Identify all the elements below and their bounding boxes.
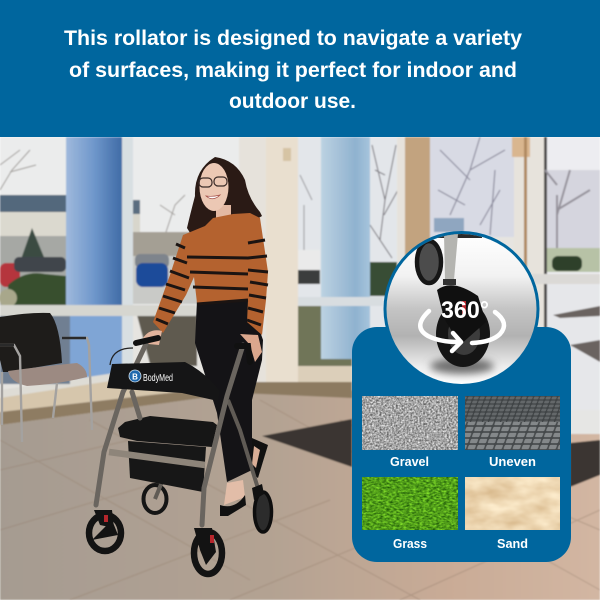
neck [216, 205, 231, 219]
surface: grass: Grass [393, 536, 427, 551]
rear wheels [144, 400, 272, 532]
header banner [0, 0, 600, 137]
handles [136, 338, 250, 362]
logo badge [129, 370, 141, 382]
left window frames [0, 137, 196, 398]
blue column left [66, 137, 122, 306]
hair [187, 157, 262, 238]
floor [0, 385, 600, 600]
logo badge: B [132, 372, 138, 382]
rollator [89, 338, 272, 574]
cross bar [109, 452, 205, 465]
heading: This rollator is designed to navigate a variety [64, 27, 522, 50]
surface: grass [362, 477, 458, 551]
chair [0, 313, 92, 442]
hands [143, 330, 162, 345]
parking lot with cars [0, 228, 239, 366]
label: 360 degrees: 360° [441, 297, 489, 324]
surface: uneven: Uneven [489, 454, 536, 469]
surface: uneven [465, 396, 560, 469]
panel: surfaces [352, 327, 571, 562]
glasses [199, 177, 227, 187]
icon: caster wheel [417, 232, 494, 374]
trousers and shoes [195, 300, 268, 516]
woman [143, 157, 268, 516]
heading: of surfaces, making it perfect for indoor and [69, 59, 517, 82]
brand name: BodyMed [143, 373, 173, 384]
brake cable [110, 348, 133, 365]
surface: sand: Sand [497, 536, 528, 551]
heading: outdoor use. [229, 90, 356, 113]
callout: 360 degree wheel [384, 231, 540, 387]
door mat [262, 419, 352, 467]
face [200, 163, 228, 211]
sweater [153, 213, 268, 335]
front wheels [89, 510, 222, 574]
right windows [298, 137, 600, 437]
smile [206, 195, 220, 199]
wall base [0, 366, 352, 425]
distant building [0, 195, 140, 236]
surface: sand [465, 477, 560, 551]
heading [64, 27, 522, 113]
left window sky [0, 137, 239, 307]
bag [128, 441, 206, 492]
surface: gravel [362, 396, 458, 469]
seat [118, 416, 217, 447]
sweater stripes [156, 240, 268, 325]
backrest [107, 362, 220, 401]
frame tubes [96, 344, 243, 525]
right door mat [570, 440, 600, 487]
photo: lobby background [0, 137, 600, 600]
icon: rotation arrows [420, 311, 504, 351]
pillar [239, 137, 298, 385]
surface: gravel: Gravel [390, 454, 429, 469]
bare tree [0, 150, 185, 235]
